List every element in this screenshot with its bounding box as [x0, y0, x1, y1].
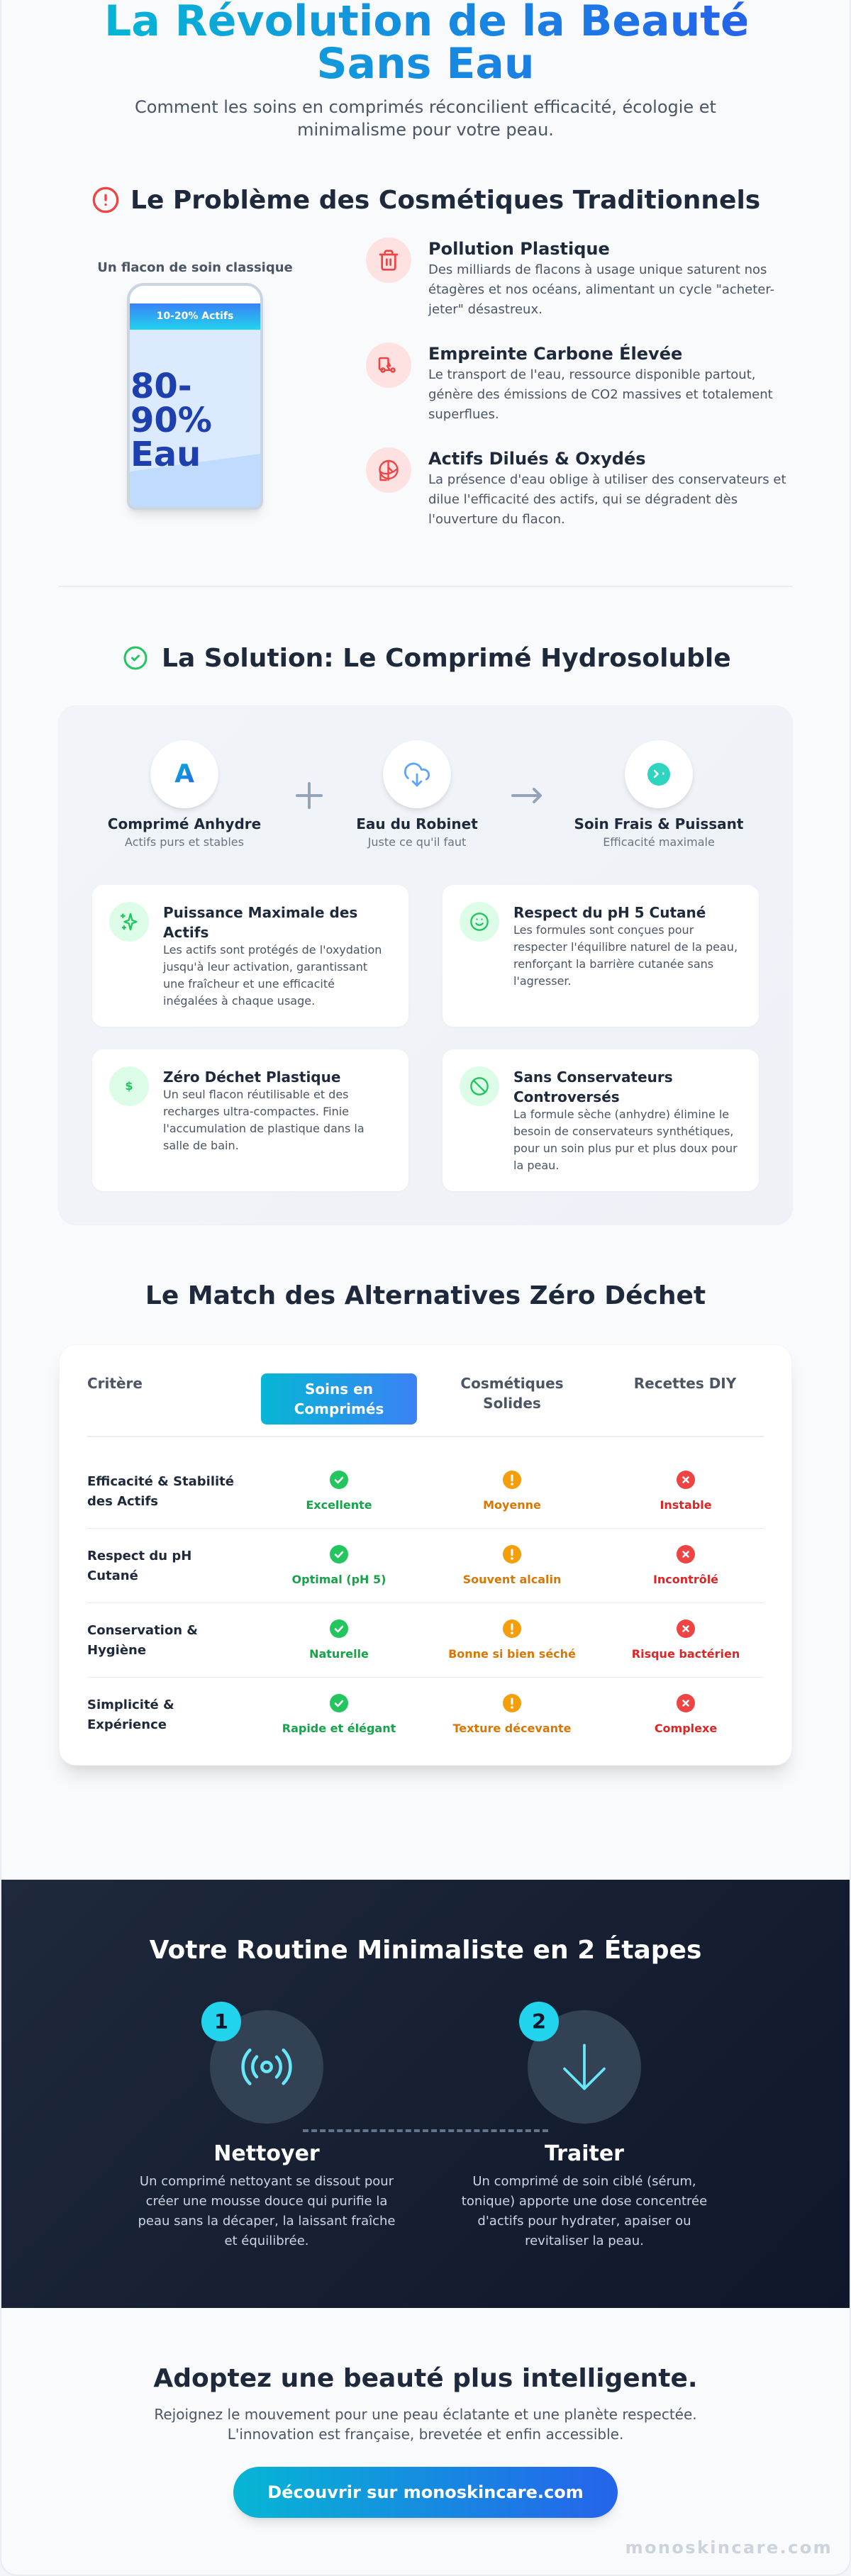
- icon: sparkles: [109, 902, 149, 942]
- table header: Solides: [483, 1395, 541, 1412]
- icon: trash: [366, 238, 411, 283]
- row: pH: Respect du pH: [87, 1549, 191, 1563]
- row: conservation: Conservation &: [87, 1623, 198, 1638]
- water percentage: 90%: [130, 401, 212, 440]
- row: efficacy: Excellente: [306, 1498, 372, 1512]
- title: Sans Eau: [316, 39, 535, 89]
- step 2: d'actifs pour hydrater, apaiser ou: [477, 2214, 691, 2229]
- row: conservation: [87, 1619, 740, 1661]
- card: maximal power: une fraîcheur et une efficacité: [163, 977, 335, 991]
- row: simplicity: [87, 1694, 717, 1735]
- card: pH: Respect du pH 5 Cutané: [513, 904, 706, 921]
- button: Découvrir sur monoskincare.com: [267, 2482, 584, 2502]
- panel: comparison table: [59, 1344, 792, 1766]
- water percentage: 80-: [130, 367, 192, 406]
- card: pH: respecter l'équilibre naturel de la peau,: [513, 940, 738, 954]
- step 1: [138, 2002, 396, 2248]
- table header: Cosmétiques: [460, 1375, 564, 1392]
- card: pH: l'agresser.: [513, 974, 572, 988]
- icon: cross: [677, 1619, 695, 1638]
- step: fresh care: [574, 740, 743, 849]
- panel: routine: [1, 1880, 850, 2308]
- problem item: carbon: génère des émissions de CO2 massives et totalement: [428, 387, 773, 402]
- badge 2: 2: [532, 2009, 546, 2034]
- bottle illustration: [127, 283, 263, 510]
- step: fresh care: Soin Frais & Puissant: [574, 815, 743, 832]
- step 1: créer une mousse douce qui purifie la: [146, 2194, 387, 2209]
- card: pH: [443, 885, 759, 1027]
- card: no preservatives: Controversés: [513, 1088, 620, 1105]
- row: efficacy: des Actifs: [87, 1494, 158, 1509]
- problem item: plastic: Pollution Plastique: [428, 239, 610, 259]
- subtitle: minimalisme pour votre peau.: [297, 120, 554, 140]
- icon: truck: [366, 342, 411, 388]
- subtitle: Comment les soins en comprimés réconcilient efficacité, écologie et: [135, 97, 716, 117]
- heading: call to action: Adoptez une beauté plus intelligente.: [153, 2364, 698, 2393]
- watermark: monoskincare.com: [625, 2538, 833, 2558]
- step 2: revitaliser la peau.: [525, 2234, 644, 2248]
- icon: letter A: A: [174, 759, 194, 788]
- water percentage: [130, 367, 212, 474]
- step 1: Nettoyer: [213, 2141, 320, 2166]
- step 1: peau sans la décaper, la laissant fraîche: [138, 2214, 396, 2229]
- problem item: carbon: superflues.: [428, 407, 499, 422]
- icon: teal tablet: [625, 740, 693, 808]
- card: no preservatives: La formule sèche (anhydre) élimine le: [513, 1108, 729, 1121]
- icon: warning: [503, 1619, 521, 1638]
- card: no preservatives: besoin de conservateurs synthétiques,: [513, 1125, 733, 1138]
- icon: cloud download: [383, 740, 451, 808]
- icon: cross: [677, 1545, 695, 1563]
- icon: dollar: $: [125, 1079, 133, 1093]
- icon: signal waves: [210, 2010, 323, 2124]
- row: pH: Optimal (pH 5): [292, 1573, 386, 1586]
- problem item: plastic: Des milliards de flacons à usage unique saturent nos: [428, 262, 767, 277]
- icon: cross: [677, 1471, 695, 1489]
- step 2: Traiter: [545, 2141, 624, 2166]
- water wave: [130, 454, 260, 507]
- step: tap water: [356, 740, 478, 849]
- dashed connector: [303, 2129, 548, 2132]
- icon: check: [330, 1619, 348, 1638]
- table header: Recettes DIY: [634, 1375, 736, 1392]
- card: no preservatives: Sans Conservateurs: [513, 1069, 673, 1086]
- step 2: tonique) apporte une dose concentrée: [462, 2194, 707, 2209]
- icon: warning: [503, 1545, 521, 1563]
- row: simplicity: Texture décevante: [452, 1722, 572, 1735]
- problem item: actives: [366, 447, 786, 527]
- icon: smile: [460, 902, 499, 942]
- card: maximal power: Actifs: [163, 924, 208, 941]
- icon: warning: [503, 1694, 521, 1712]
- button: [233, 2467, 618, 2518]
- problem item: plastic: étagères et nos océans, alimentant un cycle "acheter-: [428, 282, 774, 297]
- heading: comparison: Le Match des Alternatives Zéro Déchet: [145, 1281, 706, 1310]
- icon: arrow down: [528, 2010, 641, 2124]
- row: efficacy: Efficacité & Stabilité: [87, 1474, 234, 1489]
- icon: check: [330, 1471, 348, 1489]
- card: no preservatives: la peau.: [513, 1159, 559, 1172]
- card: maximal power: Puissance Maximale des: [163, 904, 357, 921]
- actives band: [130, 303, 260, 330]
- card: zero waste: l'accumulation de plastique dans la: [163, 1122, 365, 1135]
- step 2: Un comprimé de soin ciblé (sérum,: [472, 2174, 696, 2189]
- card: zero waste: Zéro Déchet Plastique: [163, 1069, 340, 1086]
- bottle label: Un flacon de soin classique: [97, 260, 293, 275]
- step: anhydrous tablet: Comprimé Anhydre: [108, 815, 261, 832]
- icon: check circle: [123, 647, 148, 669]
- highlighted column header: [261, 1373, 417, 1424]
- row: simplicity: Simplicité &: [87, 1697, 174, 1712]
- heading: solution: La Solution: Le Comprimé Hydrosoluble: [162, 644, 731, 673]
- heading: problem: Le Problème des Cosmétiques Traditionnels: [130, 186, 760, 215]
- icon: plus: [296, 782, 323, 809]
- badge 1: 1: [214, 2009, 228, 2034]
- icon: arrow: [511, 787, 542, 804]
- step 1: Un comprimé nettoyant se dissout pour: [140, 2174, 394, 2189]
- water fill: [130, 330, 260, 507]
- step: tap water: Eau du Robinet: [356, 815, 478, 832]
- icon: diluted: [366, 447, 411, 493]
- highlighted column header: Soins en: [305, 1381, 373, 1398]
- card: pH: renforçant la barrière cutanée sans: [513, 957, 713, 971]
- card: pH: Les formules sont conçues pour: [513, 923, 694, 937]
- card: no preservatives: pour un soin plus pur et plus doux pour: [513, 1142, 738, 1155]
- subtitle: [135, 97, 716, 140]
- row: pH: Souvent alcalin: [463, 1573, 561, 1586]
- card: zero waste: salle de bain.: [163, 1139, 239, 1152]
- step 1: et équilibrée.: [224, 2234, 309, 2248]
- step: tap water: Juste ce qu'il faut: [368, 835, 466, 849]
- row: efficacy: [87, 1471, 712, 1512]
- card: maximal power: jusqu'à leur activation, garantissant: [163, 960, 367, 974]
- icon: check: [330, 1694, 348, 1712]
- icon: check: [330, 1545, 348, 1563]
- row: pH: [87, 1545, 718, 1586]
- row: conservation: Hygiène: [87, 1643, 146, 1658]
- problem item: actives: l'ouverture du flacon.: [428, 512, 565, 527]
- title: [104, 0, 747, 85]
- row: pH: Incontrôlé: [653, 1573, 718, 1586]
- row: conservation: Naturelle: [309, 1647, 369, 1661]
- table header: [87, 1373, 736, 1424]
- step: anhydrous tablet: Actifs purs et stables: [125, 835, 244, 849]
- icon: letter A: [150, 740, 218, 808]
- heading: routine: Votre Routine Minimaliste en 2 Étapes: [150, 1936, 701, 1965]
- icon: dollar: [109, 1066, 149, 1106]
- step: fresh care: Efficacité maximale: [603, 835, 715, 849]
- section: problem: [92, 186, 786, 527]
- icon: warning: [503, 1471, 521, 1489]
- panel: solution: [59, 706, 792, 1225]
- problem item: actives: Actifs Dilués & Oxydés: [428, 449, 646, 469]
- row: simplicity: Rapide et élégant: [282, 1722, 396, 1735]
- step 2: [462, 2002, 707, 2248]
- problem item: plastic: [366, 238, 774, 317]
- problem item: carbon: Empreinte Carbone Élevée: [428, 344, 682, 364]
- call to action text: L'innovation est française, brevetée et enfin accessible.: [228, 2426, 623, 2443]
- table header: Critère: [87, 1375, 143, 1392]
- card: maximal power: Les actifs sont protégés de l'oxydation: [163, 943, 382, 957]
- problem item: actives: dilue l'efficacité des actifs, qui se dégradent dès: [428, 492, 738, 507]
- problem item: carbon: [366, 342, 773, 422]
- card: zero waste: Un seul flacon réutilisable et des: [163, 1088, 349, 1101]
- row: pH: Cutané: [87, 1568, 138, 1583]
- highlighted column header: Comprimés: [294, 1400, 384, 1417]
- call to action text: Rejoignez le mouvement pour une peau éclatante et une planète respectée.: [154, 2406, 697, 2423]
- problem item: actives: La présence d'eau oblige à utiliser des conservateurs et: [428, 472, 786, 487]
- step: anhydrous tablet: [108, 740, 261, 849]
- call to action text: [154, 2406, 697, 2443]
- badge 1: [201, 2002, 241, 2041]
- row: simplicity: Complexe: [655, 1722, 717, 1735]
- icon: ban: [460, 1066, 499, 1106]
- icon: alert circle: [92, 187, 119, 213]
- row: conservation: Risque bactérien: [632, 1647, 740, 1661]
- row: efficacy: Moyenne: [483, 1498, 541, 1512]
- card: zero waste: recharges ultra-compactes. Finie: [163, 1105, 349, 1118]
- problem item: plastic: jeter" désastreux.: [428, 302, 543, 317]
- problem item: carbon: Le transport de l'eau, ressource disponible partout,: [428, 367, 755, 382]
- card: maximal power: [92, 885, 408, 1027]
- icon: cross: [677, 1694, 695, 1712]
- row: efficacy: Instable: [660, 1498, 712, 1512]
- card: maximal power: inégalées à chaque usage.: [163, 994, 315, 1008]
- row: simplicity: Expérience: [87, 1717, 167, 1732]
- card: no preservatives: [443, 1049, 759, 1191]
- card: zero waste: [92, 1049, 408, 1191]
- water percentage: Eau: [130, 435, 201, 474]
- badge 2: [519, 2002, 559, 2041]
- actives band: 10-20% Actifs: [157, 311, 233, 322]
- row: conservation: Bonne si bien séché: [448, 1647, 576, 1661]
